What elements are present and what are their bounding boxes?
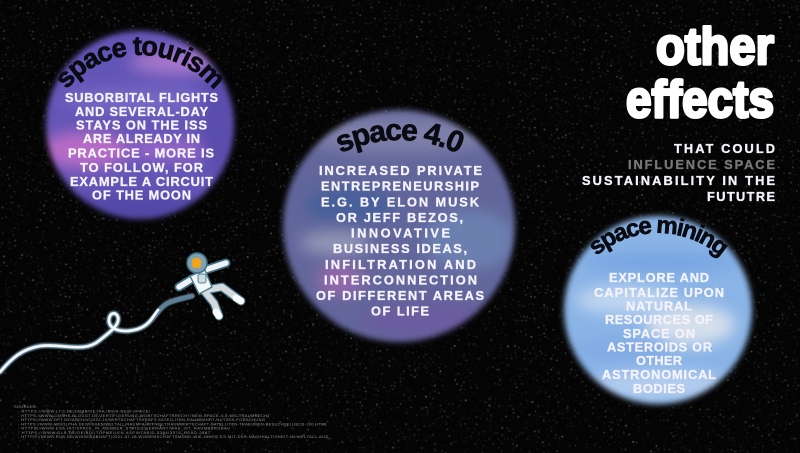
sources: - HTTPS://WWW.LTO.DE/DBBB/DETAIL/6006-NEW-SPACE/ — [18, 408, 151, 414]
sources: - HTTPS://WWW.DLR.DE/DE/BDI/TOPMEILEN.ASPX/TABID-2384/3376_READ-2887 — [18, 430, 211, 435]
body text: space 4.0: OF DIFFERENT AREAS — [316, 288, 484, 303]
planet texture: grey blue — [275, 105, 525, 350]
body text: space mining: SPACE ON — [623, 326, 695, 341]
body text: space tourism — [65, 90, 218, 202]
body text: space mining: RESOURCES OF — [605, 312, 713, 327]
subtitle — [582, 141, 775, 204]
title: other effects: other — [656, 18, 774, 76]
body text: space 4.0: INNOVATIVE — [351, 226, 450, 240]
sources: - HTTPS://WWW.ESA.INT/SPACE_IN_MEMBER_STATES/GERMANY/WAS_IST_RAUMBERGBAU — [18, 426, 230, 430]
body text: space mining: NATURAL — [626, 298, 692, 314]
astronaut arms — [179, 263, 226, 287]
body text: space 4.0 — [316, 163, 484, 318]
subtitle: INFLUENCE SPACE — [628, 157, 775, 172]
heading: space mining: space mining — [590, 218, 728, 258]
planet: space 4.0 — [278, 106, 520, 346]
icon: astronaut — [179, 253, 241, 316]
body text: space tourism: STAYS ON THE ISS — [76, 118, 207, 132]
subtitle: SUSTAINABILITY IN THE — [582, 173, 775, 188]
astronaut boots — [216, 298, 241, 316]
body text: space mining: BODIES — [633, 381, 685, 396]
astronaut outline — [179, 263, 241, 316]
subtitle: FUTUTRE — [707, 189, 775, 204]
astronaut visor — [192, 258, 201, 268]
body text: space mining: OTHER — [636, 353, 682, 368]
title: other effects: effects — [626, 71, 774, 129]
body text: space mining: EXPLORE AND — [609, 270, 709, 285]
astronaut torso — [190, 270, 212, 294]
planet: space mining — [559, 211, 757, 409]
heading: space 4.0: space 4.0 — [337, 124, 464, 154]
body text: space 4.0: INFILTRATION AND — [325, 257, 476, 272]
astronaut chest pack — [198, 274, 206, 283]
tether line — [0, 296, 192, 372]
body text: space tourism: AND SEVERAL-DAY — [75, 104, 208, 119]
body text: space 4.0: BUSINESS IDEAS, — [333, 241, 467, 256]
body text: space 4.0: INCREASED PRIVATE — [319, 163, 482, 178]
subtitle: THAT COULD — [674, 141, 775, 156]
body text: space 4.0: E.G. BY ELON MUSK — [321, 194, 480, 210]
heading: space tourism: space tourism — [58, 37, 222, 90]
sources: - HTTPS://WWW.ABSOLPHA.DE/WISSEN/WELTALL/RAUMFAHRT/WELTRAUMWIRTSCHAFT-SATELLITEN-TRAEUMEN-BESUCHSFLUECE-100.HTML — [18, 422, 328, 426]
sources: - HTTPS://WWW.DPT.DE/ARCHIV/2022-10/WIRTSCHAFTSKRAFT-SATELLITEN-RAUMFAHRT-NUTZEN-FORSCHUNG — [18, 417, 265, 422]
planet texture: purple and pink — [40, 25, 240, 226]
body text: space 4.0: INTERCONNECTION — [324, 272, 477, 288]
body text: space 4.0: OR JEFF BEZOS, — [336, 210, 463, 225]
body text: space tourism: EXAMPLE A CIRCUIT — [70, 174, 213, 189]
sources — [14, 404, 328, 439]
body text: space tourism: OF THE MOON — [92, 188, 191, 202]
body text: space tourism: PRACTICE - MORE IS — [68, 146, 214, 160]
body text: space mining — [594, 270, 724, 396]
sources: - HTTPS://WWW.CMSHS-BLOGGT.DE/ZERTIFIZIERUNG-WORTSCHAFTSRECHT/NEW-SPACE-4-0-WELTRAUMRECHT — [18, 413, 271, 418]
body text: space tourism: SUBORBITAL FLIGHTS — [65, 90, 218, 105]
title: other effects — [626, 18, 774, 129]
body text: space tourism: ARE ALREADY IN — [83, 131, 200, 146]
body text: space mining: CAPITALIZE UPON — [594, 285, 724, 300]
planet: space tourism — [42, 26, 238, 224]
body text: space mining: ASTRONOMICAL — [602, 367, 716, 382]
body text: space 4.0: OF LIFE — [371, 304, 429, 318]
body text: space tourism: TO FOLLOW, FOR — [80, 160, 203, 175]
sources: - HTTPS://NEWS.RUB.DE/WISSENSCHAFT/2021-07-28-WISSENSCHAFTSMOND-WIE-DINGE-ES-MIT-DER-NACHHALTIGKEIT-IM-WELTALL-AUS — [18, 434, 328, 439]
body text: space 4.0: ENTREPRENEURSHIP — [321, 178, 479, 194]
astronaut helmet — [187, 253, 207, 273]
planet texture: light blue — [555, 210, 765, 410]
sources: SOURCES: — [14, 404, 37, 409]
astronaut legs — [205, 287, 241, 316]
body text: space mining: ASTEROIDS OR — [607, 340, 712, 354]
